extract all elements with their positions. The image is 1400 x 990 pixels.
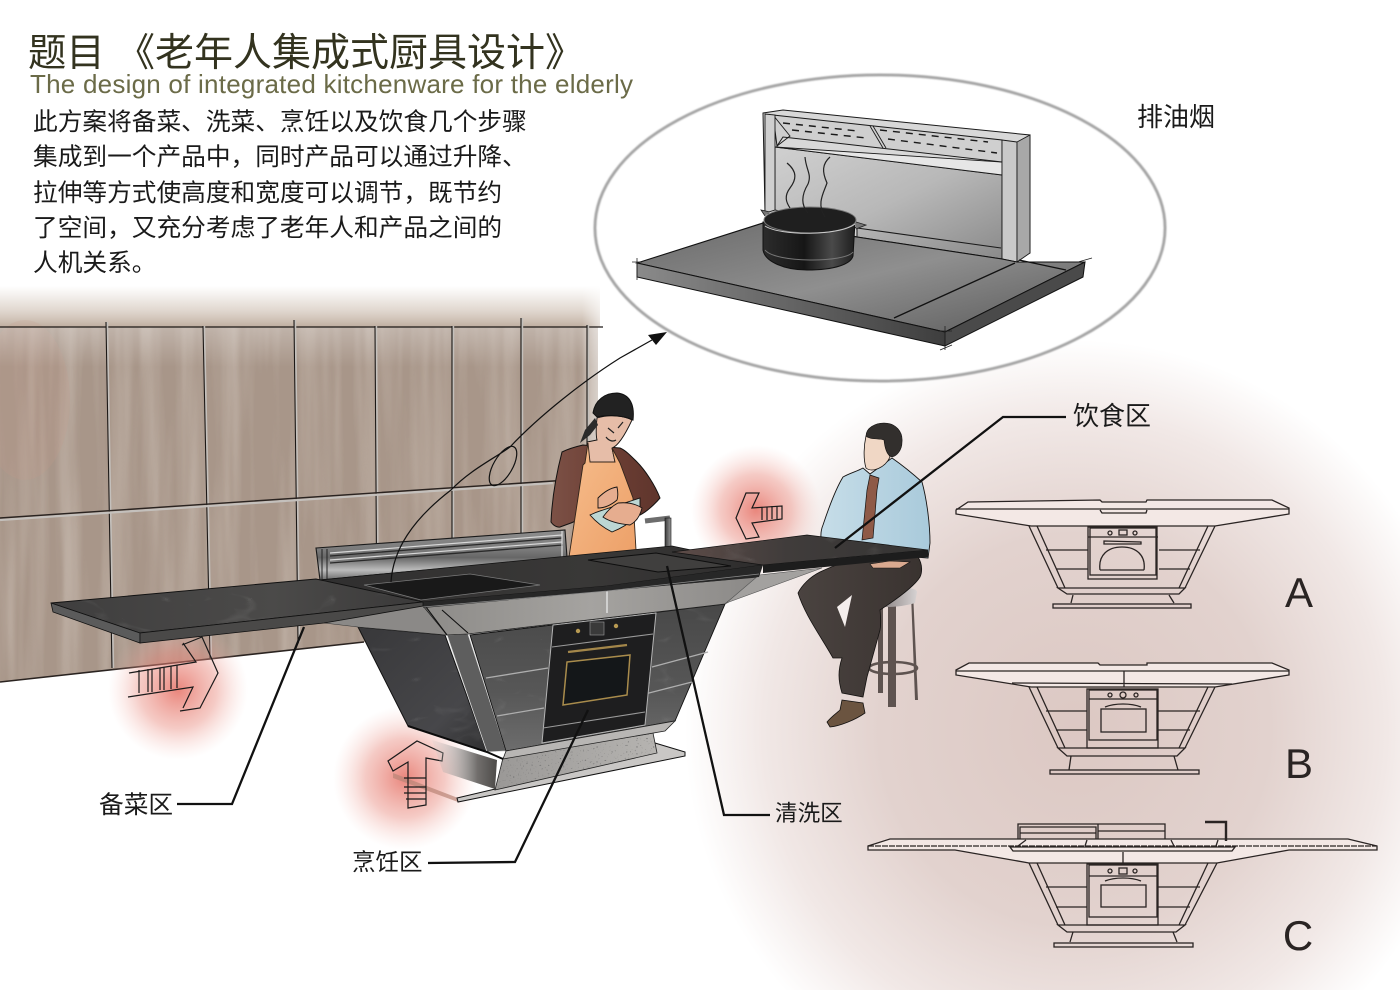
label: prep zone: 备菜区 <box>99 791 173 819</box>
title: 题目 <box>28 32 105 75</box>
leader: cooking zone <box>428 710 588 863</box>
elevation drawing A <box>956 500 1289 608</box>
leader: dining zone <box>835 417 1066 548</box>
letter B: B <box>1285 740 1313 787</box>
sink <box>588 553 731 572</box>
worktop: right extension <box>672 535 928 573</box>
hood back panel <box>763 110 1030 262</box>
faucet <box>645 518 671 555</box>
elevation drawing C <box>868 822 1377 947</box>
worktop: central <box>320 546 763 608</box>
description text: 了空间，又充分考虑了老年人和产品之间的 <box>33 214 502 242</box>
subtitle: The design of integrated kitchenware for the elderly <box>30 69 633 99</box>
panel: wood wall <box>0 284 612 682</box>
elevation drawing B <box>956 663 1289 774</box>
description text: 此方案将备菜、洗菜、烹饪以及饮食几个步骤 <box>33 108 527 136</box>
icon: extend arrow right <box>736 493 782 539</box>
background glow: pink <box>640 300 1400 990</box>
leader: prep zone <box>177 627 304 804</box>
red glow: right <box>691 445 821 575</box>
bar stool <box>869 588 918 707</box>
red glow: bottom <box>333 706 477 850</box>
figure: woman cooking <box>551 393 660 557</box>
hob plate <box>632 223 1092 350</box>
description text: 拉伸等方式使高度和宽度可以调节，既节约 <box>33 179 502 207</box>
front marble band <box>324 568 822 635</box>
cooktop <box>364 574 540 600</box>
figure: seated man <box>798 423 930 727</box>
built-in oven <box>542 613 656 743</box>
island body <box>358 604 725 759</box>
red glow: left <box>108 620 248 760</box>
detail ellipse: range hood <box>595 75 1165 381</box>
leader: washing zone <box>667 566 770 815</box>
island pedestal and base <box>432 733 685 802</box>
label: dining zone: 饮食区 <box>1073 401 1151 431</box>
label: exhaust: 排油烟 <box>1137 102 1215 132</box>
backsplash range hood <box>316 530 567 580</box>
icon: lift arrow up <box>388 741 458 808</box>
worktop: left extension <box>51 579 423 643</box>
letter C: C <box>1283 912 1313 959</box>
label: washing zone: 清洗区 <box>775 801 843 826</box>
label: cooking zone: 烹饪区 <box>352 849 422 875</box>
arrow to detail <box>391 332 667 582</box>
letter A: A <box>1285 569 1313 616</box>
steam <box>786 157 830 217</box>
description text: 人机关系。 <box>33 249 156 277</box>
description text: 集成到一个产品中，同时产品可以通过升降、 <box>33 143 527 171</box>
title: product name: 《老年人集成式厨具设计》 <box>116 32 584 75</box>
icon: extend arrow left <box>128 637 218 711</box>
kitchen island <box>51 518 928 802</box>
cooking pot <box>761 207 866 270</box>
description text <box>33 108 527 277</box>
